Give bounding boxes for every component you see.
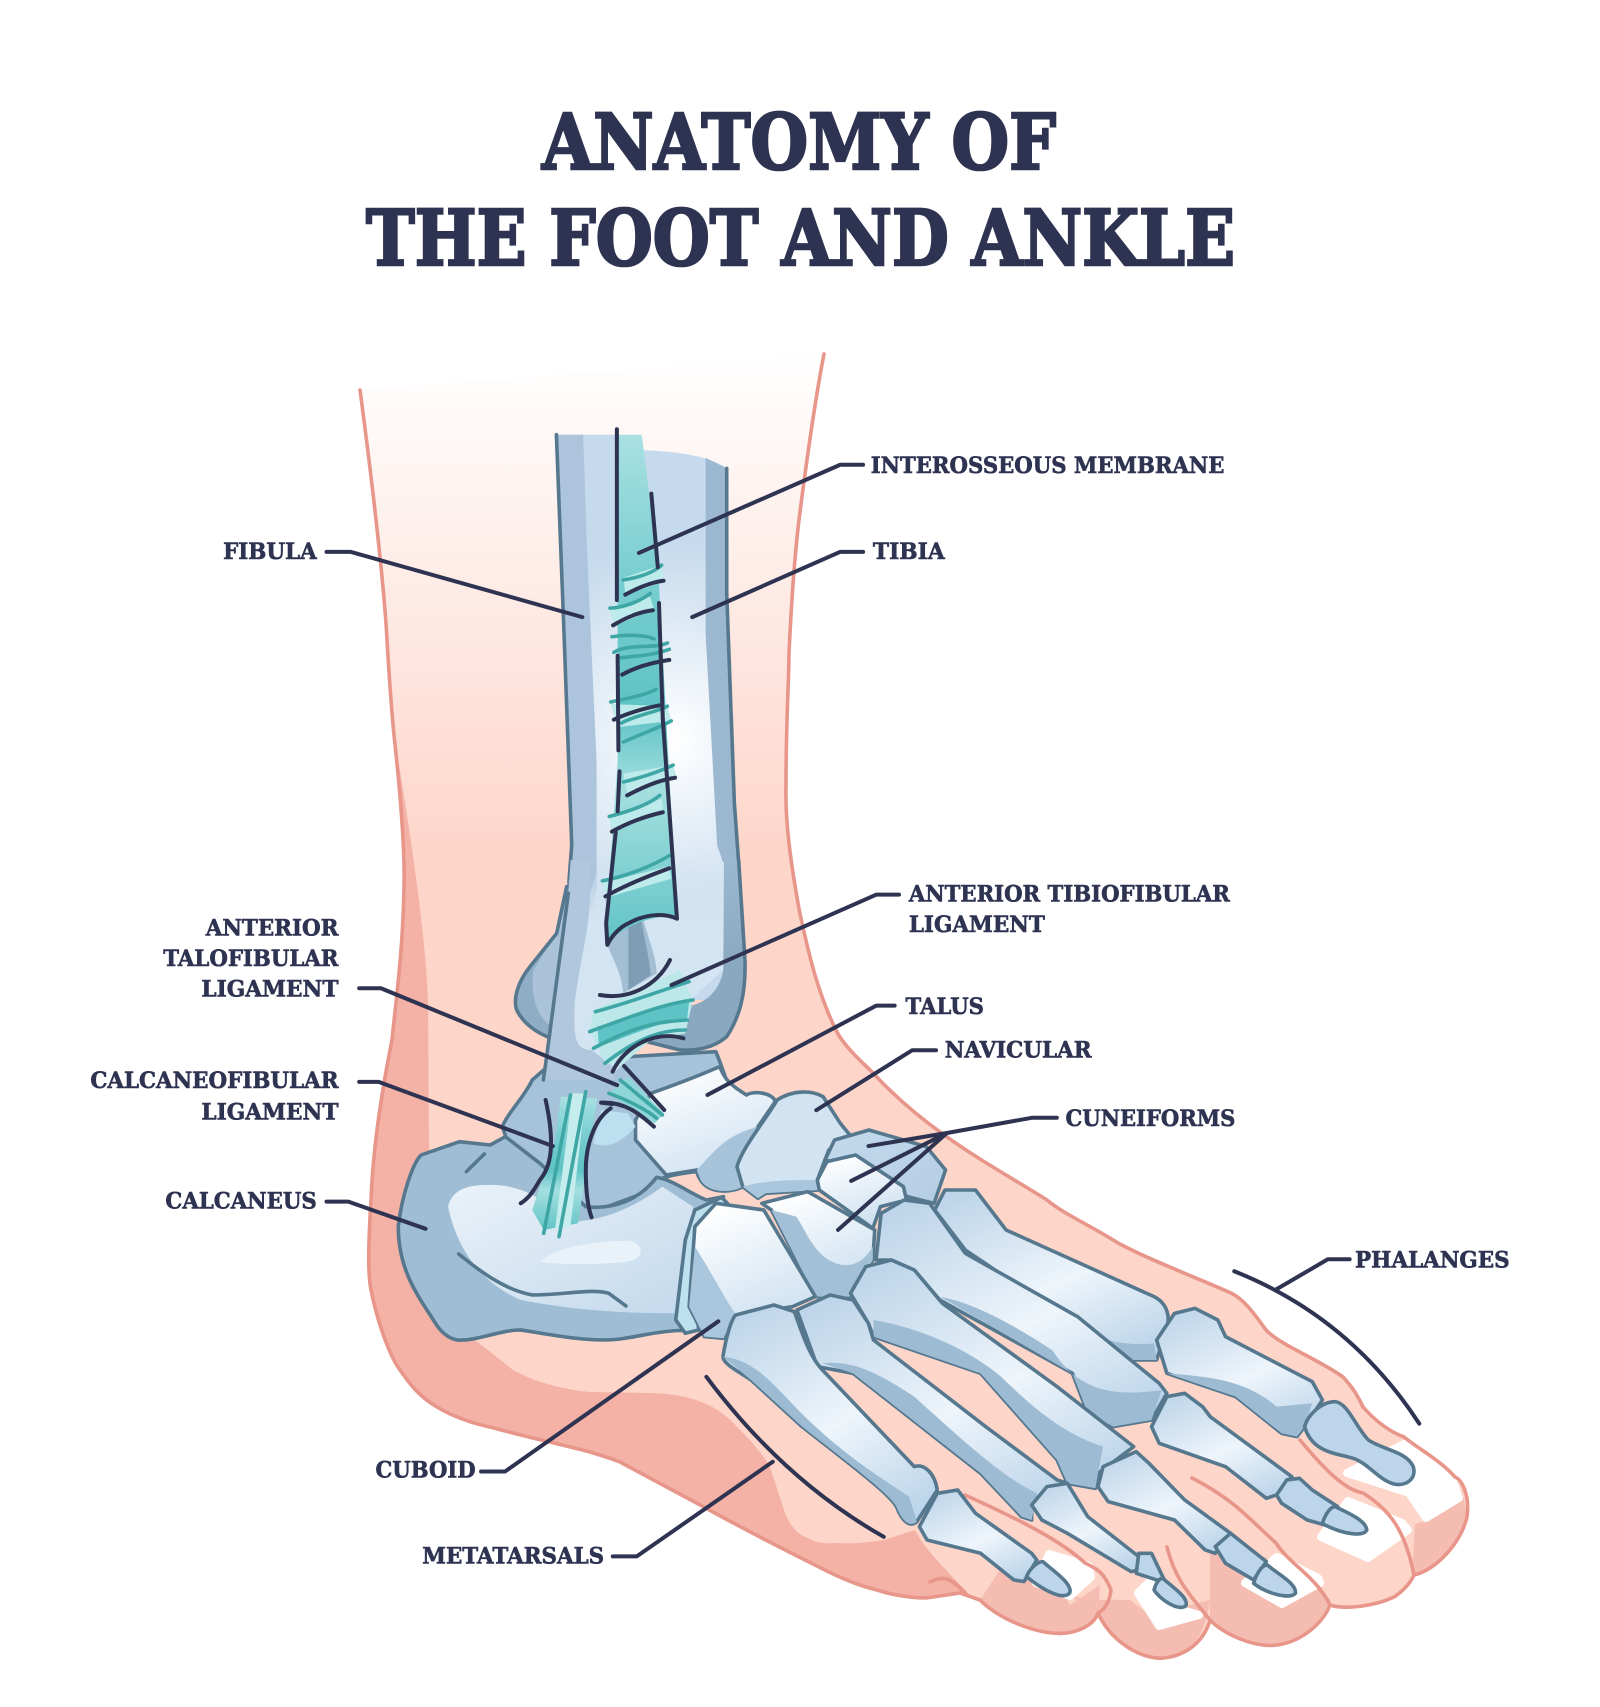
label: cuboid (375, 1321, 718, 1484)
membrane strands (602, 565, 673, 881)
label: anterior tibiofibular ligament (672, 882, 1230, 985)
title: THE FOOT AND ANKLE (366, 194, 1235, 284)
calcaneus ridge (459, 1254, 626, 1306)
label: tibia: TIBIA (873, 539, 945, 565)
label: calcaneofibular ligament (90, 1068, 553, 1146)
label: cuneiforms: CUNEIFORMS (1066, 1106, 1235, 1132)
label: navicular: NAVICULAR (945, 1037, 1092, 1063)
navicular (737, 1092, 850, 1198)
label: anterior talofibular ligament: LIGAMENT (201, 976, 339, 1002)
anterior talofibular ligament (602, 1066, 664, 1127)
label: anterior talofibular ligament: TALOFIBULAR (163, 946, 339, 972)
tibia and fibula shafts (556, 435, 744, 1000)
anterior tibiofibular ligament (590, 960, 693, 1072)
pale strand bands (602, 565, 677, 898)
skin outline (360, 354, 1468, 1658)
label: phalanges: PHALANGES (1355, 1247, 1510, 1273)
label: anterior tibiofibular ligament: ANTERIOR TIBIOFIBULAR (908, 882, 1230, 908)
leader lines and labels (90, 453, 1510, 1569)
lower tibia light face (574, 860, 727, 1073)
label: interosseous membrane: INTEROSSEOUS MEMBRANE (871, 453, 1224, 479)
label: interosseous membrane (639, 453, 1224, 553)
label: cuboid: CUBOID (375, 1458, 476, 1484)
label: anterior talofibular ligament: ANTERIOR (205, 915, 339, 941)
lateral malleolus (515, 880, 568, 1038)
upper metatarsal (935, 1190, 1168, 1360)
dark heel band (370, 763, 970, 1596)
toe tip shadows (980, 1490, 1467, 1658)
membrane dark lines (605, 429, 677, 945)
label: calcaneus: CALCANEUS (165, 1189, 317, 1215)
label: fibula: FIBULA (223, 539, 317, 565)
lower fibula body (543, 860, 615, 1080)
interosseous membrane (602, 429, 677, 945)
label: anterior tibiofibular ligament: LIGAMENT (909, 912, 1045, 938)
label: metatarsals (422, 1377, 884, 1569)
second metatarsal (876, 1200, 1167, 1427)
calcaneus (398, 1137, 724, 1340)
talus rear body (502, 1052, 743, 1213)
ligaments (521, 960, 693, 1237)
foot and leg skin (300, 354, 1468, 1700)
label: talus: TALUS (906, 994, 984, 1020)
talus head (636, 1067, 775, 1191)
round talar dome (593, 1110, 636, 1145)
label: phalanges (1234, 1247, 1510, 1424)
label: calcaneus (165, 1189, 426, 1229)
skin silhouette (360, 354, 1468, 1658)
calcaneofibular ligament (521, 1092, 613, 1237)
cuboid connector (676, 1197, 727, 1333)
intermediate cuneiform (817, 1155, 906, 1228)
malleoli and lower fibula (515, 860, 745, 1080)
label: cuneiforms (838, 1106, 1235, 1230)
fibula shade band (556, 435, 597, 1000)
metatarsals and phalanges (723, 1190, 1414, 1607)
toe separators (930, 1440, 1414, 1620)
dark gap between bones (607, 920, 657, 993)
cuboid (689, 1203, 815, 1338)
medial cuneiform (825, 1130, 946, 1203)
label: calcaneofibular ligament: LIGAMENT (201, 1099, 339, 1125)
fourth metatarsal (797, 1295, 1067, 1520)
ankle bones (398, 1052, 946, 1340)
membrane base (606, 435, 677, 942)
label: metatarsals: METATARSALS (422, 1543, 604, 1569)
lateral cuneiform (762, 1192, 875, 1297)
label: navicular (816, 1037, 1092, 1110)
toe nails (1036, 1444, 1459, 1626)
medial malleolus outline (647, 860, 745, 1050)
title: ANATOMY OF (541, 98, 1056, 188)
label: calcaneofibular ligament: CALCANEOFIBULAR (90, 1068, 339, 1094)
label: anterior talofibular ligament (163, 915, 617, 1085)
calcaneus highlight (448, 1185, 693, 1313)
lateral malleolus outline (515, 887, 567, 1038)
medial malleolus (647, 860, 745, 1050)
middle and distal phalanges (1027, 1402, 1414, 1607)
fibula outline (556, 435, 572, 896)
tibia shade band (706, 458, 739, 862)
third metatarsal (851, 1260, 1134, 1488)
shaft base (556, 435, 744, 1000)
fibula line (543, 893, 568, 1080)
label: talus (707, 994, 984, 1095)
proximal phalanges (919, 1308, 1322, 1582)
title (366, 98, 1235, 284)
label: tibia (692, 539, 945, 617)
tibia outline (727, 468, 739, 862)
fifth metatarsal (723, 1305, 937, 1524)
label: fibula (223, 539, 582, 617)
